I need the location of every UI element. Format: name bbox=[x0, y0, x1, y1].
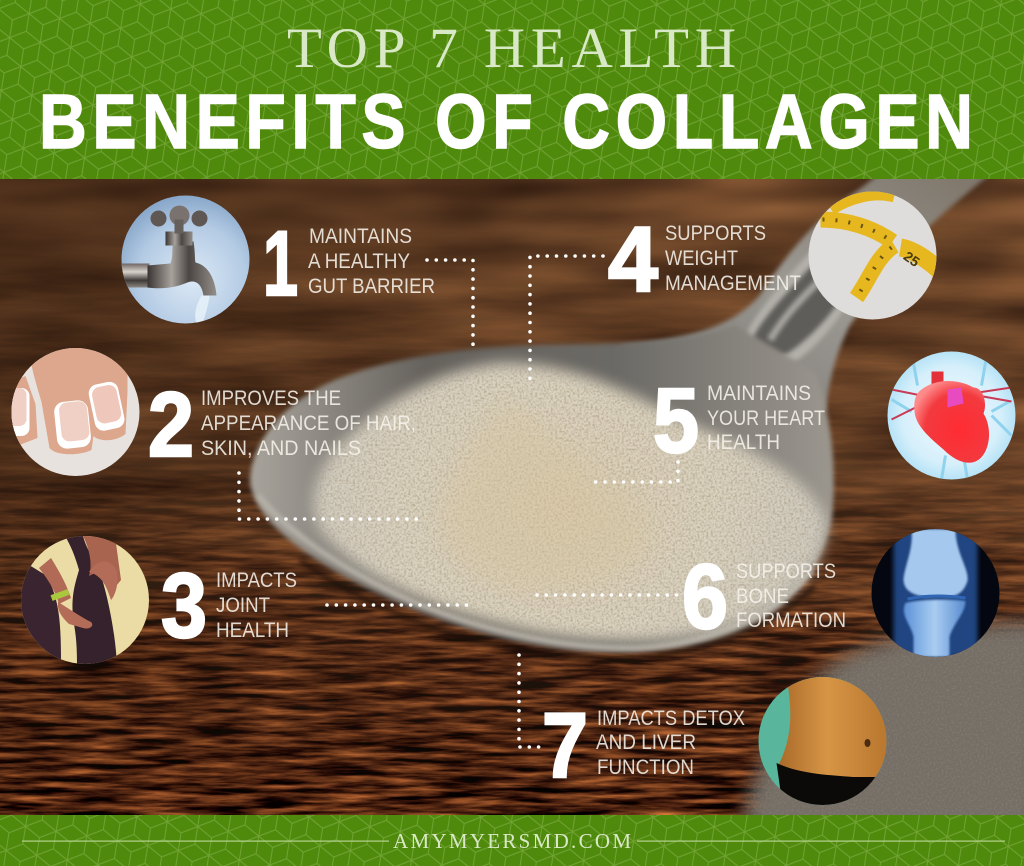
heading: benefits of collagen: BENEFITS OF COLLAGEN bbox=[39, 79, 973, 165]
connector 7 bbox=[519, 655, 539, 747]
label 7: IMPACTS DETOX bbox=[597, 707, 745, 730]
label 7 bbox=[596, 707, 745, 779]
number 5: 5 bbox=[653, 370, 699, 472]
benefit 3 bbox=[21, 536, 467, 664]
header band bbox=[0, 0, 1024, 179]
icon: water tap bbox=[122, 196, 250, 324]
label 4: WEIGHT bbox=[665, 247, 738, 270]
number 4: 4 bbox=[608, 209, 658, 311]
label 5: YOUR HEART bbox=[707, 407, 825, 430]
number 1: 1 bbox=[263, 213, 298, 315]
benefit 6 bbox=[537, 529, 1000, 657]
label 5: MAINTAINS bbox=[707, 382, 811, 405]
connector 1 bbox=[427, 260, 473, 353]
icon: heart bbox=[888, 352, 1016, 480]
label 3: HEALTH bbox=[216, 619, 289, 642]
number 7: 7 bbox=[542, 695, 588, 797]
footer website: AMYMYERSMD.COM bbox=[393, 829, 631, 853]
label 4: SUPPORTS bbox=[665, 222, 766, 245]
benefit 4 bbox=[530, 192, 938, 385]
icon: nails bbox=[8, 348, 140, 476]
label 3 bbox=[216, 569, 297, 642]
label 1: MAINTAINS bbox=[309, 225, 412, 248]
icon: knee x-ray bbox=[872, 529, 1000, 657]
collagen powder in spoon bbox=[314, 363, 826, 641]
connector 5 bbox=[595, 462, 678, 482]
spoon rim shadow bbox=[300, 560, 815, 658]
label 6: SUPPORTS bbox=[736, 560, 836, 583]
icon: measuring tape bbox=[808, 192, 938, 320]
label 1 bbox=[308, 225, 435, 298]
label 1: GUT BARRIER bbox=[308, 275, 435, 298]
powder central warm patch bbox=[443, 400, 651, 590]
benefit 1 bbox=[122, 196, 473, 353]
label 2: SKIN, AND NAILS bbox=[201, 437, 361, 460]
label 4 bbox=[665, 222, 801, 295]
benefit 5 bbox=[595, 352, 1016, 482]
spoon handle bbox=[620, 170, 995, 410]
number 3: 3 bbox=[161, 555, 207, 657]
footer band bbox=[0, 815, 1024, 866]
label 1: A HEALTHY bbox=[308, 250, 410, 273]
label 6: FORMATION bbox=[736, 609, 846, 632]
label 3: IMPACTS bbox=[216, 569, 297, 592]
number 6: 6 bbox=[682, 546, 728, 648]
benefit 2 bbox=[8, 348, 425, 519]
connector 6 bbox=[537, 593, 678, 597]
spoon bowl bbox=[250, 325, 834, 653]
label 6: BONE bbox=[736, 585, 789, 608]
connector 2 bbox=[239, 473, 425, 519]
label 2: IMPROVES THE bbox=[201, 387, 341, 410]
connector 4 bbox=[530, 256, 603, 385]
label 5: HEALTH bbox=[707, 431, 780, 454]
label 2: APPEARANCE OF HAIR, bbox=[201, 412, 416, 435]
label 7: AND LIVER bbox=[596, 731, 696, 754]
powder pile on table bbox=[745, 622, 1024, 840]
label 5 bbox=[707, 382, 825, 454]
label 2 bbox=[201, 387, 416, 460]
icon: measuring tape: 25 bbox=[901, 248, 923, 270]
benefit 7 bbox=[519, 655, 886, 805]
heading: top 7 health: TOP 7 HEALTH bbox=[287, 17, 736, 80]
label 7: FUNCTION bbox=[597, 756, 694, 779]
label 3: JOINT bbox=[216, 594, 270, 617]
label 6 bbox=[736, 560, 846, 632]
icon: abdomen bbox=[758, 677, 886, 805]
number 2: 2 bbox=[148, 374, 194, 476]
connector 3 bbox=[327, 603, 467, 607]
spoon rim highlight bbox=[258, 495, 812, 648]
label 4: MANAGEMENT bbox=[665, 272, 801, 295]
icon: knee joint bbox=[21, 536, 149, 664]
